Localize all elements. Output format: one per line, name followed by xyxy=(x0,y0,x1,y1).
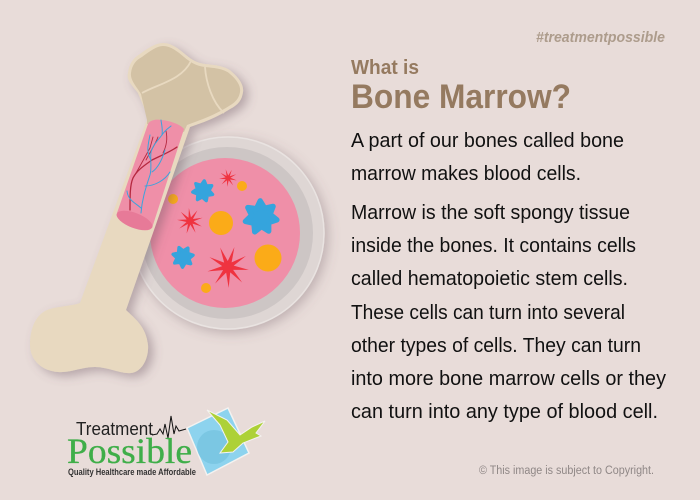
body text: called hematopoietic stem cells. xyxy=(351,268,628,290)
body text: other types of cells. They can turn xyxy=(351,335,641,357)
hashtag: #treatmentpossible xyxy=(536,30,665,46)
illustration: plate of marrow cells xyxy=(132,137,324,329)
marrow window xyxy=(117,120,184,228)
logo globe xyxy=(197,430,231,464)
heading xyxy=(351,57,571,116)
marrow cut end xyxy=(114,207,155,234)
bone head joint lines xyxy=(142,61,224,113)
bone xyxy=(30,43,243,373)
logo wordmark treatment: Treatment xyxy=(76,418,153,439)
copyright note: © This image is subject to Copyright. xyxy=(479,465,654,477)
blood vessels xyxy=(127,120,177,213)
logo pulse line xyxy=(152,416,186,438)
logo xyxy=(67,408,265,478)
body text xyxy=(351,202,666,423)
bone head xyxy=(131,46,240,132)
intro text xyxy=(351,130,624,185)
heading: What is xyxy=(351,57,419,79)
heading: Bone Marrow? xyxy=(351,78,571,116)
logo globe square xyxy=(187,408,249,475)
red cells xyxy=(174,167,252,290)
orange cells xyxy=(168,181,282,293)
body text: Marrow is the soft spongy tissue xyxy=(351,202,630,224)
logo bird xyxy=(207,410,265,453)
intro text: A part of our bones called bone xyxy=(351,130,624,152)
plate xyxy=(132,137,324,329)
body text: These cells can turn into several xyxy=(351,302,625,324)
logo tagline: Quality Healthcare made Affordable xyxy=(68,467,196,478)
intro text: marrow makes blood cells. xyxy=(351,163,581,185)
bone outline xyxy=(30,43,243,373)
logo wordmark possible: Possible xyxy=(67,431,192,471)
body text: inside the bones. It contains cells xyxy=(351,235,636,257)
body text: can turn into any type of blood cell. xyxy=(351,401,658,423)
body text: into more bone marrow cells or they xyxy=(351,368,666,390)
blue cells xyxy=(172,178,280,268)
